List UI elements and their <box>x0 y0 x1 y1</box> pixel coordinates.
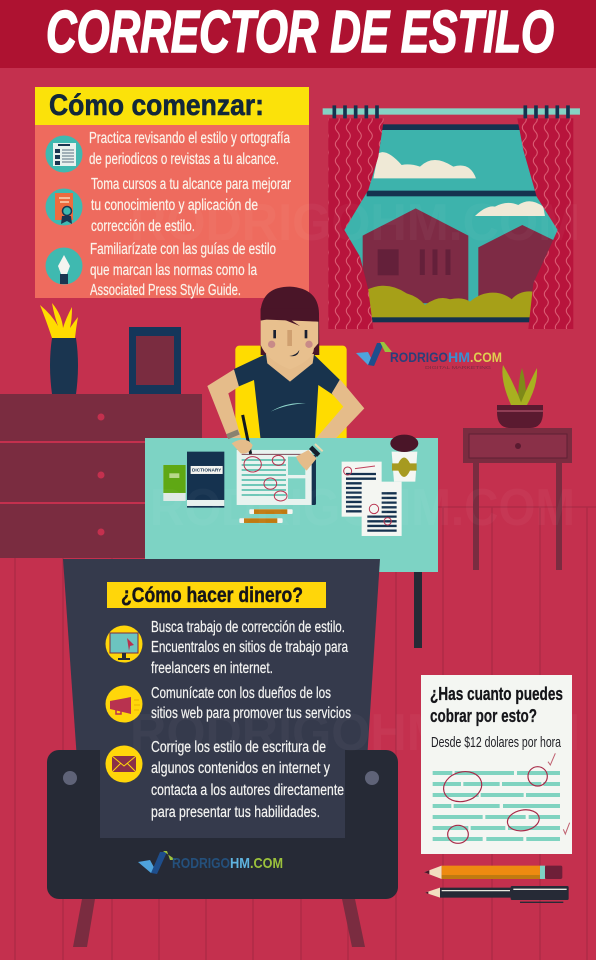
text: toma cursos: Toma cursos a tu alcance para mejorar <box>91 176 291 193</box>
logo: rodrigohm bottom: .COM <box>250 855 283 872</box>
hands and pen <box>227 415 323 471</box>
green book <box>163 465 186 501</box>
heading: cómo hacer dinero: ¿Cómo hacer dinero? <box>121 584 303 607</box>
text: practica: de periodicos o revistas a tu alcance. <box>89 151 279 168</box>
picture frame <box>129 327 181 394</box>
vase with plant <box>40 303 78 394</box>
watermarks: RODRIGOHM.COM <box>130 704 580 762</box>
text: comunícate: sitios web para promover tus servicios <box>151 705 351 722</box>
text: toma cursos: corrección de estilo. <box>91 218 195 235</box>
text: familiarízate <box>90 241 276 299</box>
icon: envelope <box>106 746 142 782</box>
logo: rodrigohm bottom: RODRIGO <box>172 855 230 872</box>
sofa <box>47 559 398 947</box>
text: comunícate <box>151 685 351 722</box>
dresser <box>0 394 202 558</box>
text: busca trabajo: Busca trabajo de corrección de estilo. <box>151 619 345 636</box>
heading: cómo comenzar: Cómo comenzar: <box>49 89 264 122</box>
logo: rodrigohm bottom: HM <box>230 855 250 872</box>
logo: rodrigohm top: RODRIGO <box>390 349 448 365</box>
pencil <box>424 866 562 879</box>
card: cuánto cobrar <box>421 675 572 854</box>
text: busca trabajo: Encuentralos en sitios de trabajo para <box>151 639 348 656</box>
dictionary <box>187 452 224 508</box>
woman <box>207 287 364 453</box>
logo: rodrigohm bottom <box>138 851 283 874</box>
stacked papers <box>342 462 402 536</box>
coffee cup <box>390 435 418 482</box>
text: corrige: algunos contenidos en internet y <box>151 760 330 777</box>
text: familiarízate: Familiarízate con las guías de estilo <box>90 241 276 258</box>
pencils <box>239 509 293 523</box>
desk <box>145 438 438 648</box>
logo: rodrigohm top <box>356 342 502 370</box>
person at chair <box>207 287 364 453</box>
desk items <box>163 415 418 536</box>
logo: rodrigohm top: HM <box>448 349 470 365</box>
window with curtains <box>323 105 580 329</box>
side table with plant <box>463 365 572 570</box>
icon: certificate <box>46 188 82 226</box>
logo: rodrigohm top: DIGITAL MARKETING <box>425 365 492 370</box>
card heading: cobrar por esto? <box>430 705 537 726</box>
icon: computer <box>106 626 142 662</box>
chair <box>235 346 347 446</box>
icon: fountain pen <box>46 248 82 284</box>
icon: megaphone <box>106 686 142 722</box>
text: corrige: para presentar tus habilidades. <box>151 804 320 821</box>
watermarks: RODRIGOHM.COM <box>130 194 580 252</box>
card heading <box>430 683 563 726</box>
pen <box>425 886 569 902</box>
text: busca trabajo <box>151 619 348 677</box>
text: corrige: Corrige los estilo de escritura de <box>151 739 326 756</box>
text: practica: Practica revisando el estilo y ortografía <box>89 130 290 147</box>
text: toma cursos: tu conocimiento y aplicación de <box>91 197 258 214</box>
text: familiarízate: Associated Press Style Guide. <box>90 282 241 299</box>
text: practica <box>89 130 290 168</box>
text: toma cursos <box>91 176 291 235</box>
panel: cómo comenzar <box>35 87 309 299</box>
logo: rodrigohm top: .COM <box>470 349 502 365</box>
text: corrige <box>151 739 344 821</box>
text: comunícate: Comunícate con los dueños de los <box>151 685 331 702</box>
icon: newspaper <box>46 136 82 172</box>
text: busca trabajo: freelancers en internet. <box>151 660 273 677</box>
text: familiarízate: que marcan las normas como la <box>90 262 257 279</box>
marked text lines <box>433 753 570 843</box>
header banner <box>0 0 596 68</box>
watermarks <box>130 194 580 762</box>
dictionary: DICTIONARY <box>192 468 222 474</box>
marked document <box>237 450 316 505</box>
text: corrige: contacta a los autores directamente <box>151 782 344 799</box>
